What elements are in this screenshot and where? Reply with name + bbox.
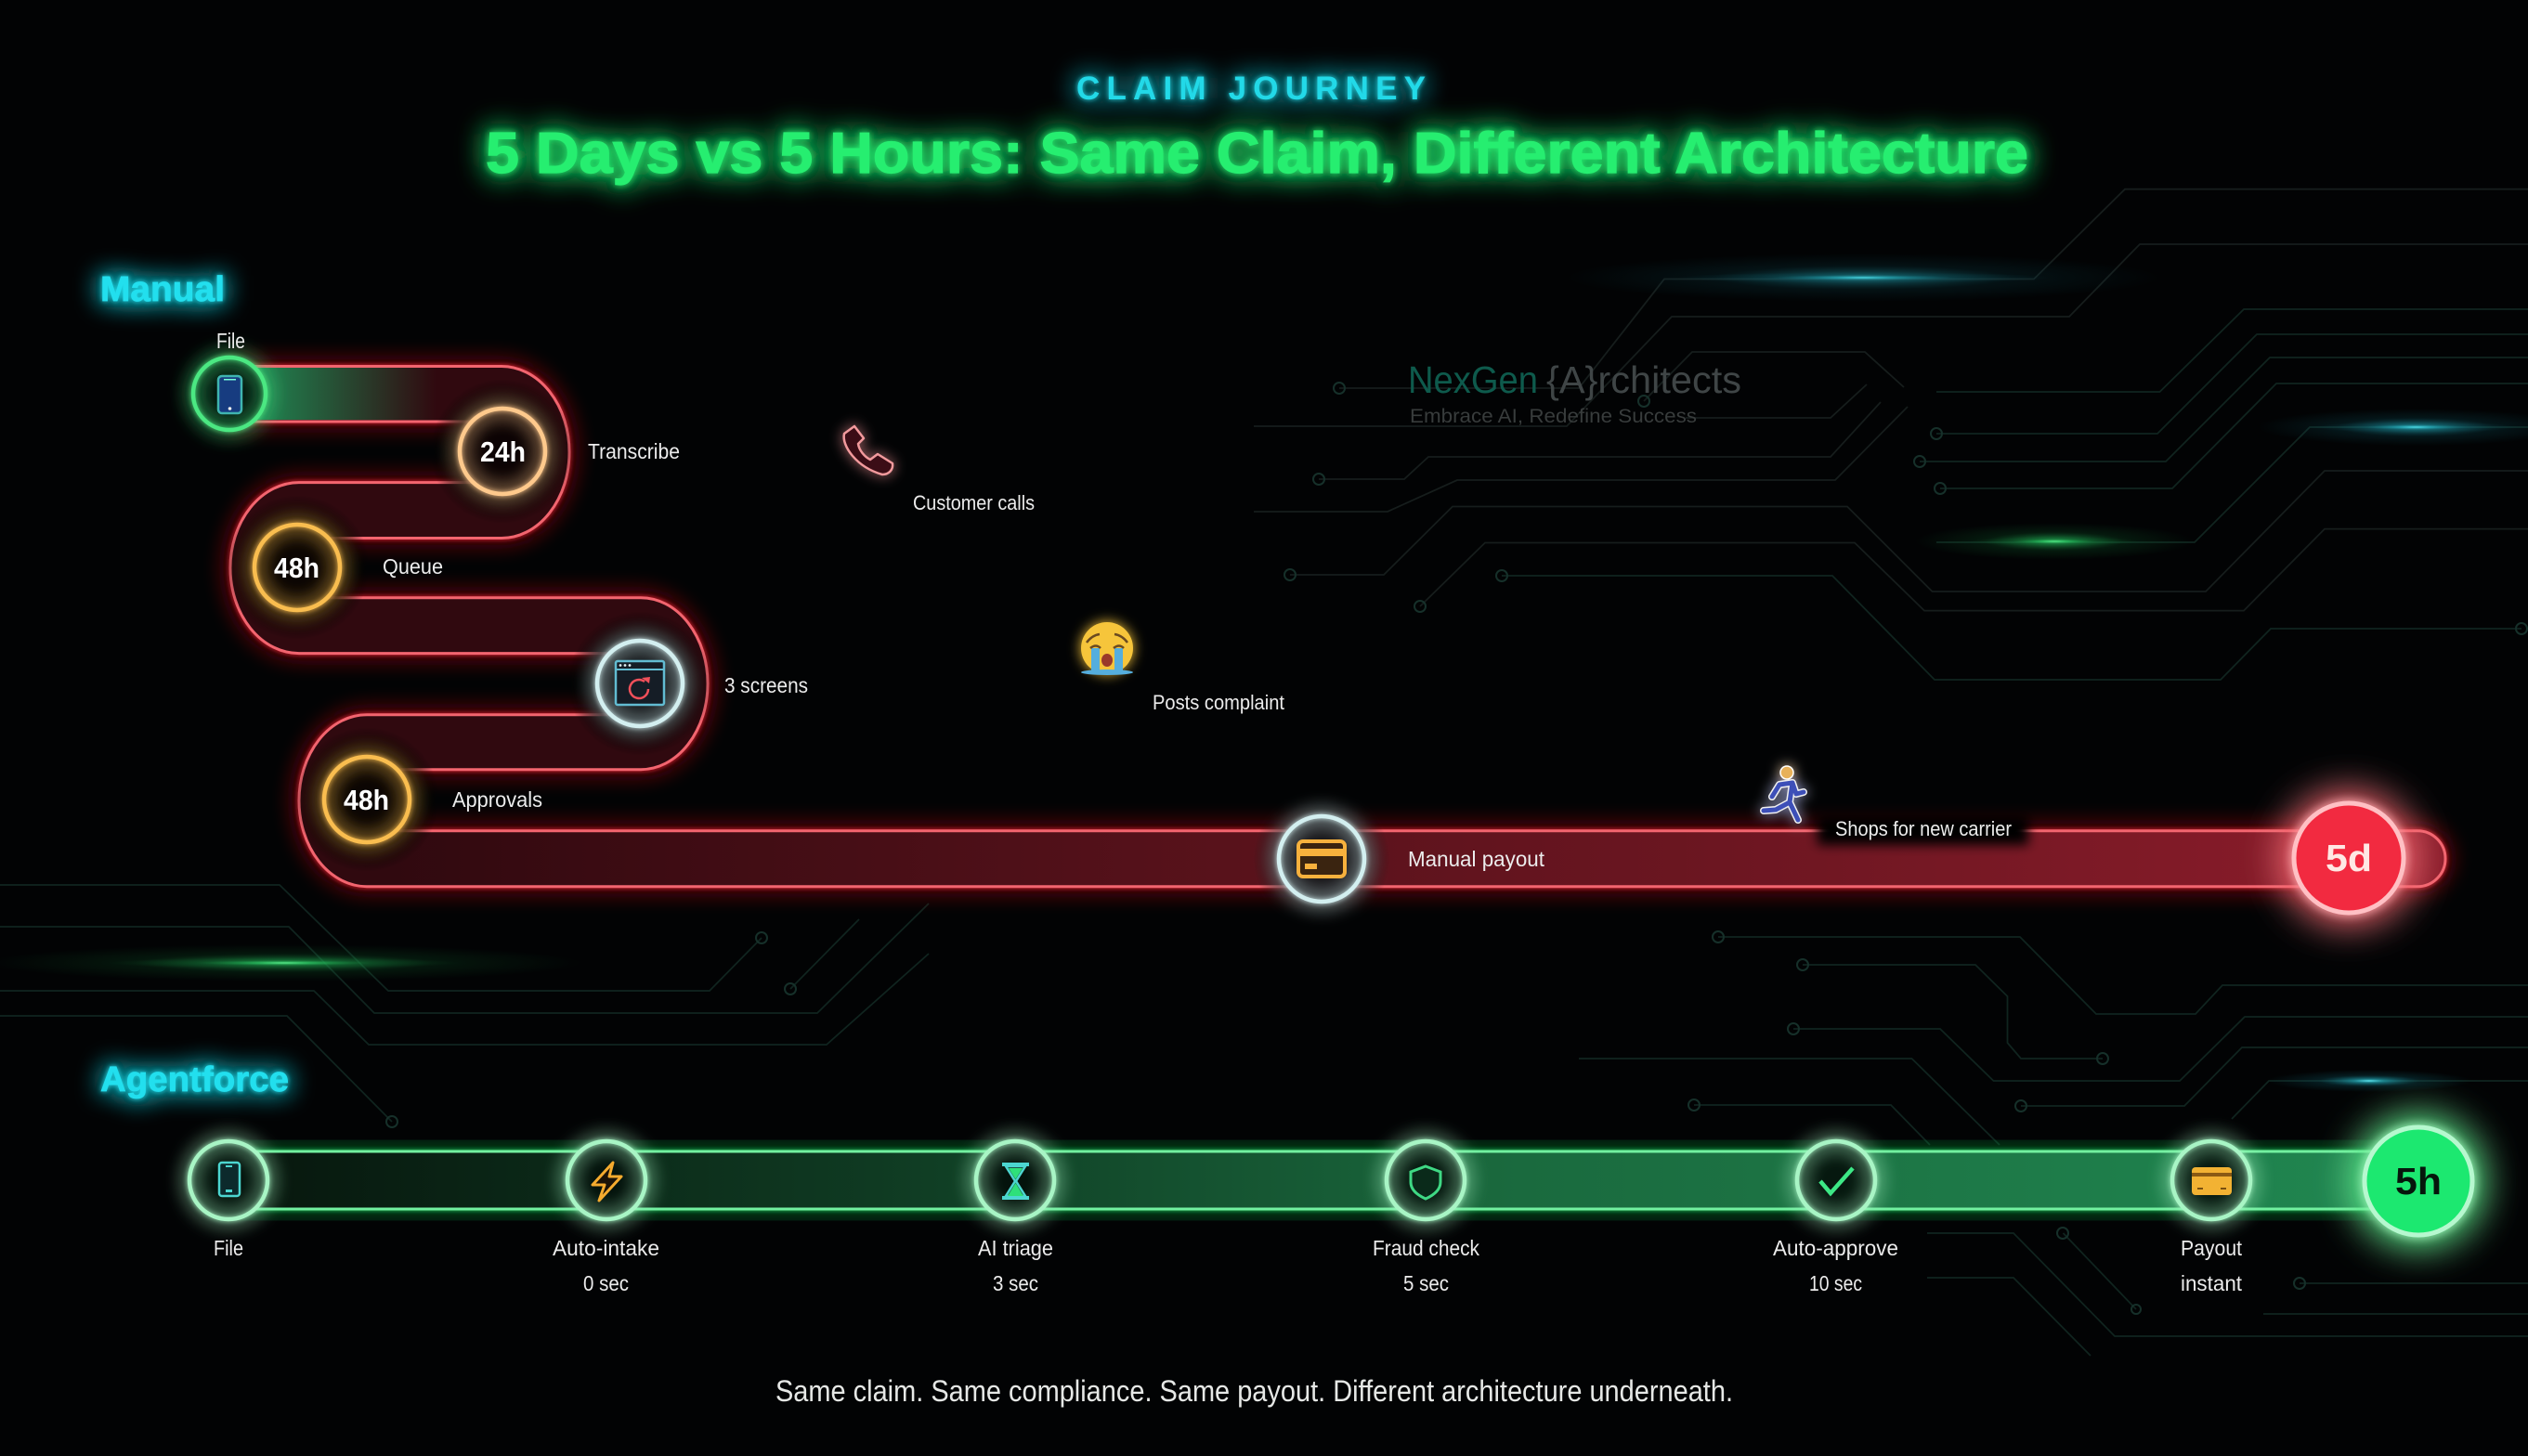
label: 3 screens: 3 screens bbox=[724, 673, 808, 697]
label: AI triage 3 sec: AI triage bbox=[978, 1236, 1053, 1260]
watermark: NexGen Architects: NexGen bbox=[1408, 358, 1538, 401]
icon: check bbox=[1820, 1168, 1853, 1193]
track fill bbox=[229, 1151, 2384, 1209]
title: 5 Days vs 5 Hours: Same Claim, Different Architecture bbox=[486, 122, 2028, 186]
track outline bbox=[229, 1151, 2378, 1209]
red bar gradient bbox=[390, 831, 2446, 886]
label: AI triage 3 sec: 3 sec bbox=[993, 1271, 1038, 1295]
icon: phone handset bbox=[844, 426, 893, 474]
label: Payout instant bbox=[2181, 1236, 2243, 1295]
label: Posts complaint: Posts complaint bbox=[1153, 691, 1284, 714]
node: 24h: 24h bbox=[480, 436, 526, 468]
icon: shield bbox=[1411, 1166, 1440, 1199]
track outline bbox=[229, 366, 2445, 887]
node: 24h bbox=[460, 409, 545, 494]
icon: card bbox=[1298, 841, 1345, 877]
eyebrow: Claim Journey: CLAIM JOURNEY bbox=[1076, 71, 1426, 107]
panel: manual serpentine track bbox=[225, 366, 2446, 928]
label: Auto-intake 0 sec bbox=[553, 1236, 659, 1295]
label: Queue: Queue bbox=[383, 554, 443, 578]
green start gradient bbox=[232, 368, 446, 420]
icon: card bbox=[2192, 1167, 2232, 1195]
light flares bbox=[0, 254, 2528, 1092]
node: AI triage bbox=[976, 1141, 1054, 1219]
label: Auto-intake 0 sec: 0 sec bbox=[583, 1271, 629, 1295]
icon: browser window bbox=[616, 661, 664, 705]
icon: lightning bolt bbox=[593, 1163, 621, 1201]
icon: runner bbox=[1764, 766, 1804, 820]
node: 5d total bbox=[2294, 803, 2404, 913]
label: Fraud check 5 sec bbox=[1373, 1236, 1479, 1295]
label: Auto-intake 0 sec: Auto-intake bbox=[553, 1236, 659, 1260]
label: Payout instant: instant bbox=[2181, 1271, 2243, 1295]
label: AI triage 3 sec bbox=[978, 1236, 1053, 1295]
node: File (manual) bbox=[193, 358, 266, 430]
label: Auto-approve 10 sec: Auto-approve bbox=[1773, 1236, 1898, 1260]
watermark: NexGen Architects: Embrace AI, Redefine Success bbox=[1410, 406, 1697, 427]
label: Payout instant: Payout bbox=[2181, 1236, 2243, 1260]
heading: Manual: Manual bbox=[100, 270, 225, 309]
label: Fraud check 5 sec: 5 sec bbox=[1403, 1271, 1449, 1295]
node: 3 screens bbox=[597, 641, 683, 726]
label: Customer calls: Customer calls bbox=[913, 491, 1035, 514]
node: manual payout bbox=[1279, 816, 1364, 902]
node: 48h queue: 48h bbox=[274, 552, 319, 584]
node: Payout bbox=[2172, 1141, 2250, 1219]
darkened halos around nodes bbox=[225, 379, 1390, 928]
heading: Agentforce: Agentforce bbox=[100, 1060, 289, 1099]
label: Fraud check 5 sec: Fraud check bbox=[1373, 1236, 1479, 1260]
label: Auto-approve 10 sec bbox=[1773, 1236, 1898, 1295]
label: Auto-approve 10 sec: 10 sec bbox=[1809, 1271, 1862, 1295]
track glow bbox=[229, 366, 2445, 887]
label: Approvals: Approvals bbox=[452, 787, 542, 812]
node: Auto-intake bbox=[567, 1141, 645, 1219]
icon: hourglass bbox=[1002, 1164, 1029, 1198]
icon: crying face bbox=[1081, 622, 1133, 675]
label: File: File bbox=[216, 329, 245, 353]
node: Auto-approve bbox=[1797, 1141, 1875, 1219]
node: 48h queue bbox=[254, 525, 340, 610]
node: 48h approvals bbox=[324, 757, 410, 842]
track glow bbox=[229, 1151, 2378, 1209]
node: 5d total: 5d bbox=[2326, 837, 2372, 879]
node: 48h approvals: 48h bbox=[344, 784, 389, 816]
watermark: NexGen Architects: {A}rchitects bbox=[1546, 358, 1741, 401]
track fill bbox=[229, 366, 2445, 887]
icon: phone bbox=[219, 1163, 240, 1196]
label: Transcribe: Transcribe bbox=[588, 439, 680, 463]
watermark: NexGen Architects bbox=[1408, 358, 1741, 427]
node: File (agent) bbox=[189, 1141, 267, 1219]
node: 5h total bbox=[2365, 1127, 2472, 1235]
node: Fraud check bbox=[1387, 1141, 1465, 1219]
node: 5h total: 5h bbox=[2395, 1160, 2442, 1202]
label: Manual payout: Manual payout bbox=[1408, 847, 1545, 871]
panel: agentforce track bbox=[229, 1151, 2384, 1209]
label: File: File bbox=[214, 1236, 243, 1260]
label: Shops for new carrier: Shops for new carrier bbox=[1835, 817, 2012, 840]
footer statement: Same claim. Same compliance. Same payout. Different architecture underneath. bbox=[775, 1374, 1733, 1408]
icon: phone bbox=[218, 376, 241, 413]
